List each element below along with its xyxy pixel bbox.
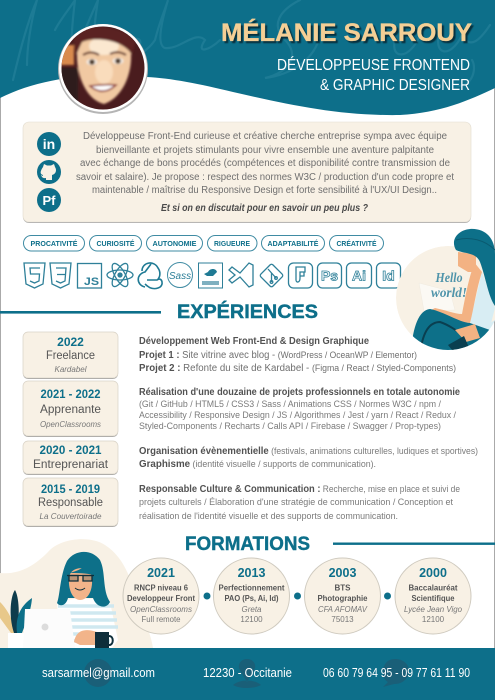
icon: javascript <box>78 264 102 288</box>
icon: photoshop: Ps <box>321 268 338 284</box>
footer <box>0 648 495 700</box>
formation: 2021: RNCP niveau 6 <box>134 584 189 592</box>
text: culture: projets culturels / Élaboration d'une stratégie de communication / Conception et <box>139 497 453 507</box>
text: culture <box>139 484 460 521</box>
contact location: 12230 - Occitanie <box>203 666 292 680</box>
card: 2015-2019 <box>23 478 118 527</box>
formation: 2013: PAO (Ps, Ai, Id) <box>224 594 279 603</box>
formation: 2021: OpenClassrooms <box>130 605 192 614</box>
intro text: bienveillante et projets stimulants pour vivre ensemble une aventure palpitante <box>96 145 434 156</box>
text: culture: Responsable Culture & Communication : Recherche, mise en place et suivi de <box>139 484 460 495</box>
contact email: sarsarmel@gmail.com <box>42 666 155 680</box>
formation: 2003: CFA AFOMAV <box>318 605 368 614</box>
card: 2021-2022: Apprenante <box>40 404 101 416</box>
formation timeline <box>123 558 471 634</box>
icon: illustrator: Ai <box>352 268 366 284</box>
icon: git <box>259 263 284 288</box>
icon: css3 <box>50 263 71 288</box>
formation: 2000: 12100 <box>422 615 445 624</box>
icon: portfolio: Pf <box>42 193 56 208</box>
formation: 2013: Perfectionnement <box>218 584 285 592</box>
intro text: maintenable / maîtrise du Responsive Design et forte sensibilité à l'UX/UI Design.. <box>92 185 437 196</box>
timeline dots <box>204 592 391 600</box>
formation: 2013: 2013 <box>238 566 265 580</box>
text: web development <box>139 336 456 374</box>
card: 2015-2019: La Couvertoirade <box>40 512 102 521</box>
card: 2015-2019: 2015 - 2019 <box>41 482 100 496</box>
icon: figma <box>288 263 312 288</box>
intro text: savoir et salaire). Je propose : respect des normes W3C / production d'un code propre et <box>76 172 454 183</box>
icon: redux <box>138 263 162 289</box>
card: 2022 <box>23 332 118 379</box>
text: events: Organisation évènementielle (festivals, animations culturelles, ludiques et sportives) <box>139 446 478 457</box>
card: 2021-2022: 2021 - 2022 <box>40 387 101 401</box>
intro text: avec échange de bons procédés (compétences et disponibilité contre transmission de <box>80 158 450 169</box>
icon: mail backdrop <box>84 659 112 687</box>
icon: portfolio <box>37 188 61 212</box>
formation: 2013: Greta <box>241 605 262 614</box>
icon: sass <box>168 262 192 288</box>
icon: react <box>107 261 133 289</box>
card: 2020-2021: 2020 - 2021 <box>40 443 102 457</box>
intro text: Et si on en discutait pour en savoir un peu plus ? <box>161 203 368 214</box>
soft skills pills: ADAPTABILITÉ <box>268 239 318 248</box>
icon: location backdrop <box>233 659 261 688</box>
formation: 2003: 2003 <box>329 566 356 580</box>
icon: phone backdrop <box>383 659 409 687</box>
formation: 2003 <box>304 558 380 634</box>
contact phone: 06 60 79 64 95 - 09 77 61 11 90 <box>323 666 470 680</box>
text: projects: (Git / GitHub / HTML5 / CSS3 / Sass / Animations CSS / Normes W3C / npm / <box>139 399 441 409</box>
formation: 2000 <box>395 558 471 634</box>
text: culture: réalisation de l'identité visuelle et des supports de communication. <box>139 511 398 521</box>
soft skills pills: CURIOSITÉ <box>96 239 134 248</box>
icon: indesign: Id <box>382 268 395 284</box>
heading: experiences: EXPÉRIENCES <box>177 301 318 323</box>
card: 2015-2019: Responsable <box>38 497 103 509</box>
text: projects: Styled-Components / Recharts / Calls API / Firebase / Swagger / Prop-types) <box>139 421 441 431</box>
name title: MÉLANIE SARROUY <box>221 18 472 47</box>
icon: linkedin: in <box>43 136 55 152</box>
formation: 2000: 2000 <box>419 566 447 580</box>
card: 2021-2022 <box>23 381 118 437</box>
icon: html5 <box>24 263 45 288</box>
photo <box>58 24 148 114</box>
text: web development: Projet 2 : Refonte du site de Kardabel - (Figma / React / Styled-Components) <box>139 363 456 374</box>
icon: illustrator <box>346 263 372 288</box>
card: 2022: Kardabel <box>54 365 87 374</box>
illustration: woman reading <box>396 229 495 355</box>
icon: vs code <box>229 263 253 287</box>
formation: 2021: Developpeur Front <box>127 594 195 603</box>
experience descriptions <box>139 336 478 521</box>
text: projects: Accessibility / Responsive Design / JS / Algorithmes / Jest / yarn / React / Redux / <box>139 410 456 420</box>
illustration: woman at laptop <box>0 539 153 648</box>
formation: 2000: Scientifique <box>412 594 455 603</box>
intro text: Développeuse Front-End curieuse et créative cherche entreprise sympa avec équipe <box>83 131 447 142</box>
technology icons <box>24 261 400 289</box>
formation: 2021 <box>123 558 199 634</box>
job title: DÉVELOPPEUSE FRONTEND <box>277 55 470 74</box>
text: web development: Développement Web Front-End & Design Graphique <box>139 336 369 347</box>
card: 2022: Freelance <box>46 350 95 362</box>
card: 2021-2022: OpenClassrooms <box>40 420 101 429</box>
formation: 2003: Photographie <box>318 594 368 603</box>
icon: sass: Sass <box>169 271 191 282</box>
soft skills pills: AUTONOMIE <box>152 239 196 248</box>
icon: photoshop <box>318 263 342 288</box>
heading: formations: FORMATIONS <box>185 534 310 555</box>
text: web development: Projet 1 : Site vitrine avec blog - (WordPress / OceanWP / Elementor) <box>139 350 417 361</box>
intro text <box>76 131 454 214</box>
soft skills pills: RIGUEURE <box>214 239 250 248</box>
formation: 2021: 2021 <box>147 566 175 580</box>
text: events <box>139 446 478 470</box>
text: projects: Réalisation d'une douzaine de projets professionnels en totale autonomie <box>139 387 460 398</box>
icon: alpha <box>198 263 222 288</box>
experience cards <box>23 332 118 527</box>
text: events: Graphisme (identité visuelle / supports de communication). <box>139 459 376 470</box>
card: 2020-2021 <box>23 441 118 475</box>
lettering: hello world: world! <box>431 286 467 301</box>
icon: indesign <box>376 263 400 288</box>
icon: javascript: JS <box>84 276 99 288</box>
text: projects <box>139 387 460 431</box>
formation: 2003: BTS <box>334 584 351 592</box>
formation: 2003: 75013 <box>331 615 354 624</box>
icon: github <box>37 160 61 184</box>
header band <box>0 0 495 115</box>
job title: & GRAPHIC DESIGNER <box>320 77 470 94</box>
lettering: hello world: Hello <box>435 271 462 286</box>
job title <box>277 55 470 94</box>
soft skills pills: PROCATIVITÉ <box>30 239 78 248</box>
card: 2020-2021: Entreprenariat <box>33 459 109 471</box>
card: 2022: 2022 <box>57 335 84 349</box>
lettering: hello world <box>431 271 467 301</box>
soft skills pills <box>24 236 384 251</box>
formation: 2013 <box>214 558 290 634</box>
panel: introduction <box>23 122 471 223</box>
formation: 2013: 12100 <box>240 615 263 624</box>
formation: 2021: Full remote <box>142 615 181 624</box>
formation: 2000: Lycée Jean Vigo <box>404 605 463 614</box>
soft skills pills: CRÉATIVITÉ <box>336 239 376 248</box>
icon: linkedin <box>37 132 61 156</box>
formation: 2000: Baccalauréat <box>408 584 458 592</box>
